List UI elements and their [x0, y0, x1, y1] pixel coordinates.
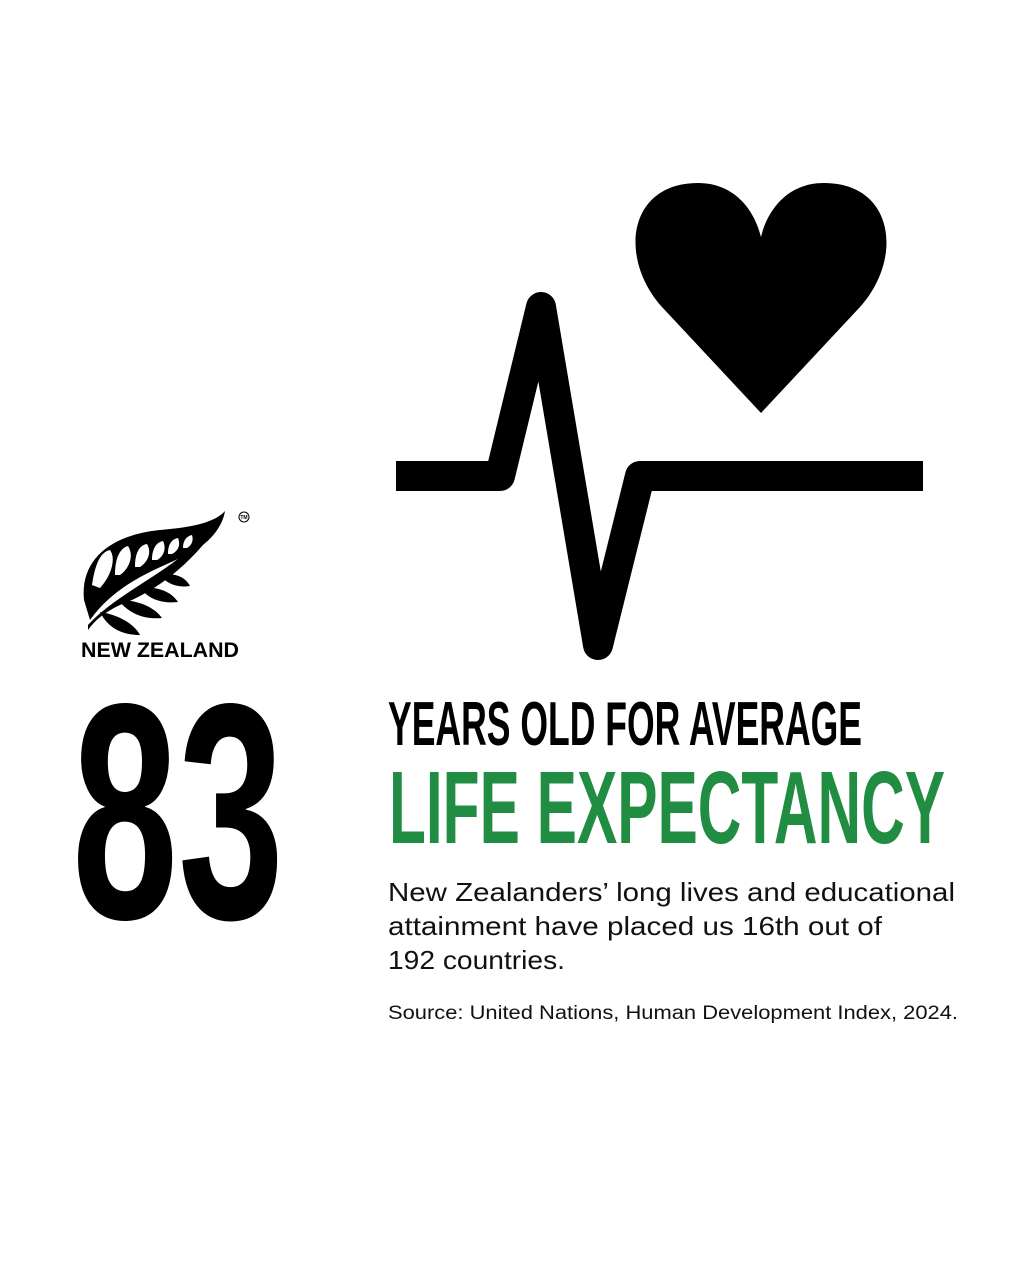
big number 83: 83: [72, 640, 284, 984]
body text: New Zealanders’ long lives and educational: [388, 877, 955, 907]
fern frond: [84, 511, 225, 635]
body text: attainment have placed us 16th out of: [388, 911, 883, 941]
trademark: TM: [240, 515, 248, 521]
logo: New Zealand fern: [81, 511, 249, 662]
icon: heart: [636, 183, 886, 413]
trademark: [239, 512, 249, 522]
source note: Source: United Nations, Human Development Index, 2024.: [388, 1003, 958, 1024]
body text: 192 countries.: [388, 945, 565, 975]
body text: [388, 877, 955, 975]
icon: heartbeat line: [396, 307, 923, 645]
logo wordmark: NEW ZEALAND: [81, 639, 239, 662]
